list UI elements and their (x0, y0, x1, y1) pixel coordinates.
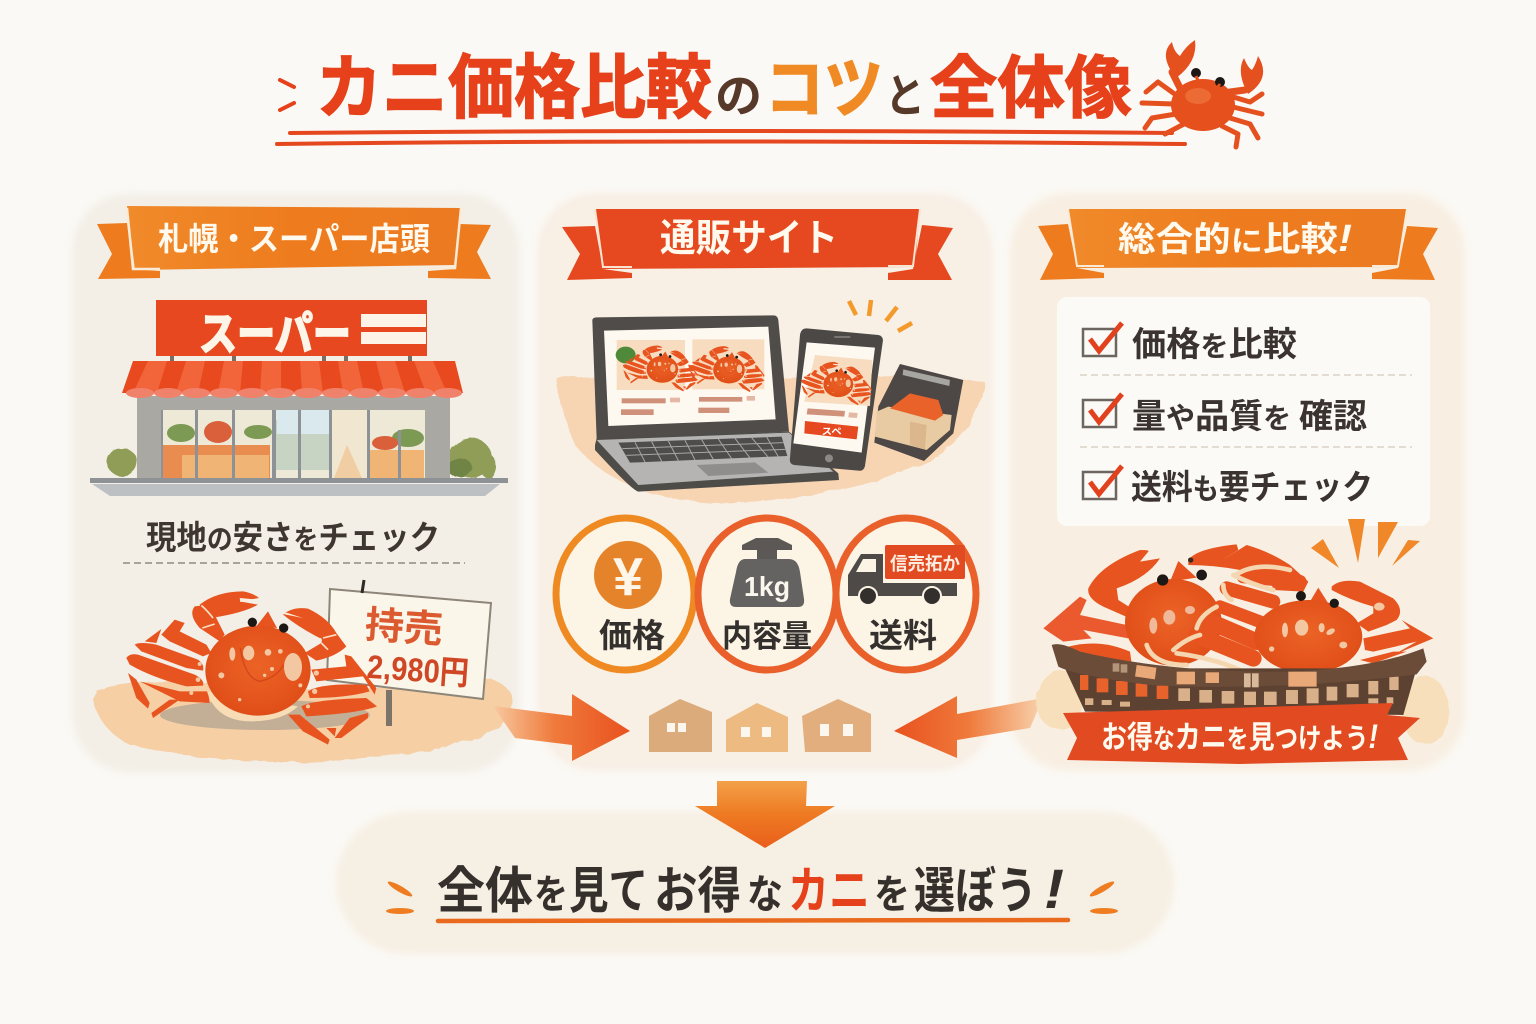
conclusion text (437, 857, 1064, 920)
conclusion text: カニ (788, 863, 870, 919)
circle: price: ¥ (613, 547, 643, 607)
conclusion text: を (534, 873, 568, 917)
conclusion text: お得 (654, 863, 741, 919)
icon: smartphone: スペ (822, 426, 842, 436)
circle: weight: 1kg (744, 571, 790, 602)
awning (122, 361, 463, 393)
ribbon: overall comparison heading (1038, 209, 1438, 280)
conclusion accent marks (386, 879, 1118, 914)
device illustrations (592, 315, 963, 492)
conclusion pill (336, 812, 1174, 954)
ribbon: online shop heading: 通販サイト (660, 218, 838, 260)
arrow: down to conclusion (695, 781, 835, 848)
illustration: sand patch (93, 678, 512, 762)
circle: weight: 内容量 (722, 619, 812, 654)
title: コツ (765, 52, 883, 126)
arrow: from overview (894, 696, 1043, 758)
basket of crabs (1043, 544, 1433, 715)
price sign text: 持売 (363, 605, 444, 652)
conclusion text: ! (1044, 857, 1064, 920)
title (316, 49, 1132, 127)
circle: weight (698, 518, 836, 670)
title: と (885, 70, 925, 122)
panel: supermarket background (72, 193, 520, 773)
sign post (386, 690, 392, 726)
checklist item: quality: 量や品質を 確認 (1132, 398, 1367, 436)
title double underline (277, 131, 1185, 144)
basket weave (1065, 668, 1417, 715)
big crab (126, 591, 377, 745)
text: check local prices: 現地の安さをチェック (146, 519, 440, 556)
ribbon: online shop heading (562, 209, 953, 280)
bushes (107, 438, 496, 478)
dashed divider (123, 562, 465, 564)
left crab limbs (1043, 544, 1308, 663)
store sign (156, 300, 427, 356)
icon: sparkle rays (849, 300, 912, 331)
sand wash behind basket (1036, 670, 1449, 744)
title: の (715, 70, 762, 122)
ribbon: supermarket heading: 札幌・スーパー店頭 (158, 221, 430, 257)
ribbon: find bargain crabs (1063, 703, 1420, 764)
price sign text: 2,980円 (366, 648, 470, 692)
title: カニ価格比較 (316, 49, 712, 127)
conclusion underline (438, 920, 1068, 921)
right crab limbs (1332, 581, 1433, 663)
icon: smartphone (790, 328, 883, 471)
price sign text (361, 605, 473, 692)
icon: title crab (1142, 40, 1263, 147)
sign clip (362, 580, 364, 593)
tangled legs between crabs (1197, 577, 1300, 658)
icon: parcel box (874, 364, 963, 461)
circle: shipping (836, 518, 976, 670)
circle: shipping: 送料 (869, 617, 937, 654)
conclusion text: 全体 (437, 863, 533, 919)
crab shadow (160, 700, 370, 730)
icon: laptop (592, 315, 839, 492)
checklist item: price: 価格を比較 (1132, 326, 1297, 364)
title: 全体像 (930, 51, 1132, 127)
price sign (327, 589, 491, 699)
conclusion text: 見て (569, 863, 648, 919)
checklist item: shipping: 送料も要チェック (1131, 469, 1373, 507)
circle: price: 価格 (599, 617, 665, 654)
ribbon: find bargain crabs: お得なカニを見つけよう! (1101, 718, 1378, 756)
title accent marks (280, 80, 294, 110)
icon: burst rays over crabs (1311, 519, 1420, 568)
arrow: from supermarket (493, 694, 630, 761)
circle: price (556, 518, 694, 670)
panel: overall comparison background (1010, 193, 1465, 771)
illustration: supermarket store: スーパー (199, 308, 351, 360)
ribbon: overall comparison heading: 総合的 に比較! (1118, 218, 1352, 260)
sign posts (170, 355, 412, 363)
illustration: supermarket store (90, 300, 508, 496)
conclusion text: を (874, 873, 910, 917)
ribbon: supermarket heading (97, 206, 491, 279)
circle: shipping: 信売拓か (890, 553, 960, 574)
icons: three shops (649, 699, 871, 752)
illustration: sand patch behind devices (556, 375, 985, 503)
checklist card (1057, 297, 1430, 526)
conclusion text: 選ぼう (914, 863, 1037, 919)
conclusion text: な (747, 873, 783, 917)
panel: online shop background (537, 193, 993, 771)
